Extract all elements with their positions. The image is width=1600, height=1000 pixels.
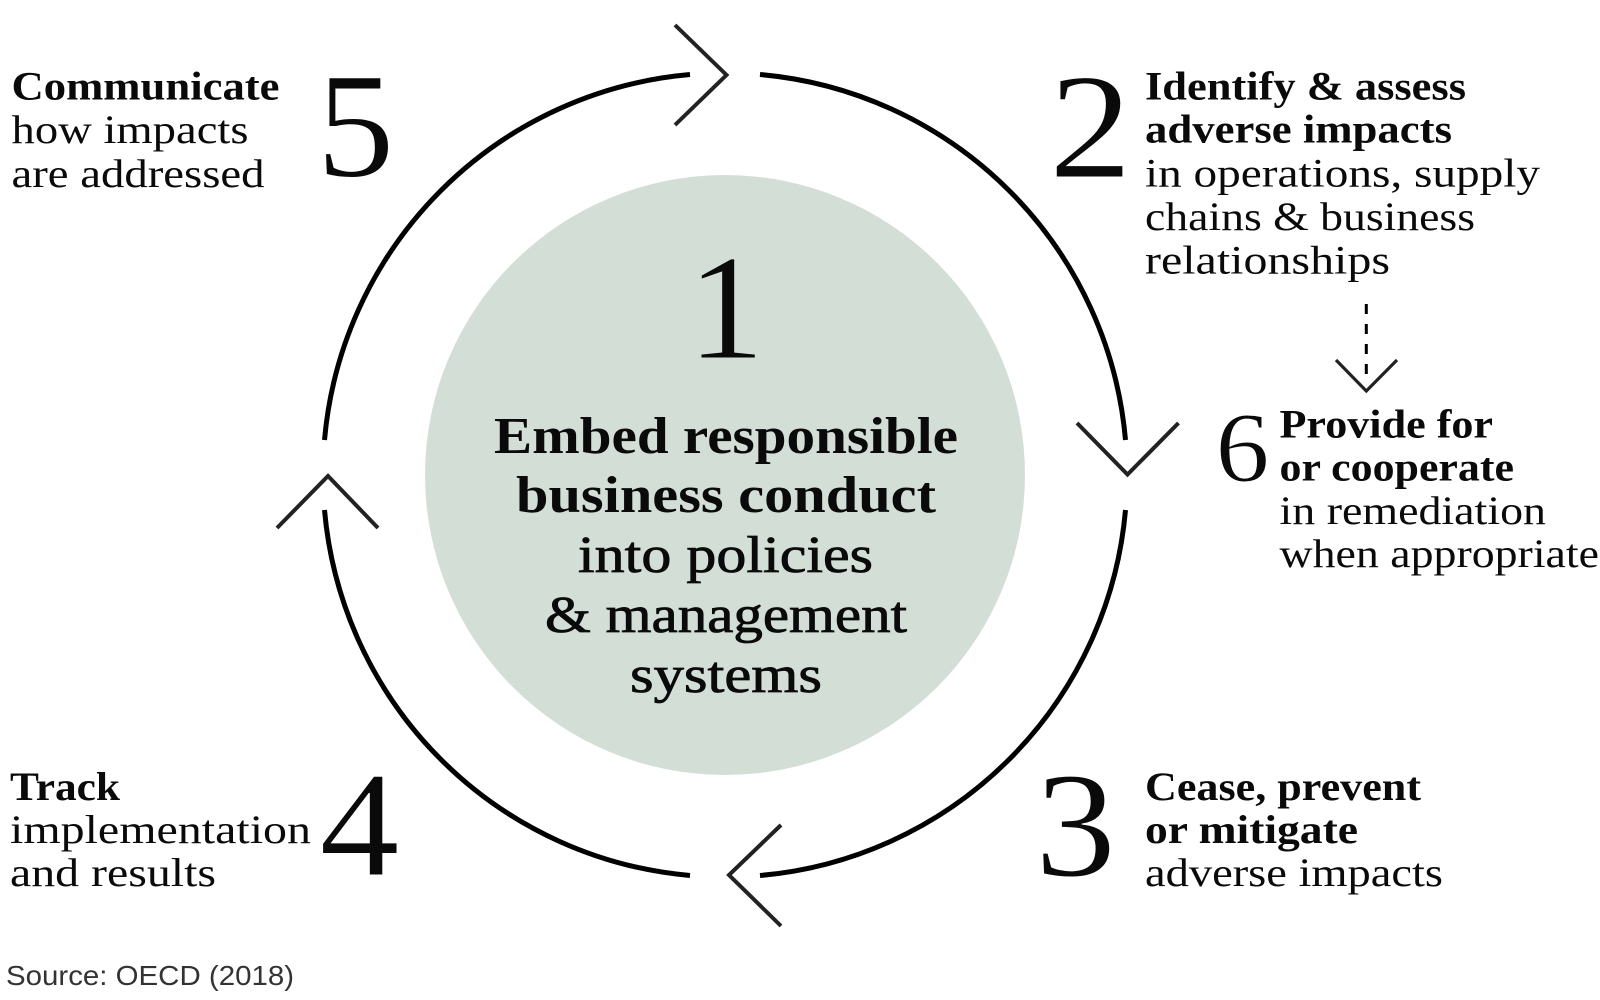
step 4: track implementation and results [10,742,400,908]
cycle ring arcs [324,74,1126,876]
step 5: communicate how impacts are addressed [12,43,394,209]
number 1: 1 [688,225,764,391]
central text: embed responsible business conduct: Embed responsible [494,408,958,465]
arrowhead: bottom [729,825,781,926]
step 2 text [1145,64,1540,282]
step 5 text: Communicate [12,64,280,108]
step 3 text: or mitigate [1145,807,1358,852]
central text: embed responsible business conduct: business conduct [516,467,937,524]
step 6 text: in remediation [1280,488,1546,533]
central circle: step 1 [425,175,1025,775]
step 6: provide for or cooperate in remediation [1216,392,1599,576]
number 5: 5 [316,43,394,209]
step 3 text: adverse impacts [1145,850,1443,895]
number 3: 3 [1035,742,1116,908]
central text: embed responsible business conduct: systems [630,647,822,704]
central text: embed responsible business conduct: into policies [578,527,873,584]
central text: embed responsible business conduct: & management [545,587,908,644]
step 6 text: when appropriate [1280,531,1599,576]
arrowhead: top [675,25,726,125]
number 4: 4 [320,742,400,908]
step 2 text: adverse impacts [1145,106,1452,152]
source note: Source: OECD (2018) [6,960,294,991]
arrowhead: left [277,476,378,528]
step 4 text: implementation [10,807,311,852]
step 2 text: relationships [1145,237,1390,282]
number 6: 6 [1216,392,1270,503]
arrowhead: right [1077,423,1178,474]
step 2: identify and assess [1049,44,1540,282]
step 5 text: how impacts [12,107,248,152]
step 2 text: Identify & assess [1145,64,1466,108]
step 6 text [1280,402,1599,576]
step 4 text: and results [10,850,216,895]
step 3 text [1145,764,1443,895]
step 4 text: Track [10,764,121,809]
step 3 text: Cease, prevent [1145,764,1422,809]
step 3: cease, prevent or mitigate [1035,742,1443,908]
step 5 text [12,64,280,196]
step 6 text: Provide for [1280,402,1493,446]
step 2 text: chains & business [1145,194,1475,239]
step 2 text: in operations, supply [1145,151,1540,196]
central text: embed responsible business conduct [494,408,958,704]
step 6 text: or cooperate [1280,444,1514,490]
step 4 text [10,764,311,895]
number 2: 2 [1049,44,1132,210]
step 5 text: are addressed [12,151,264,196]
dashed arrow from step 2 to step 6 [1336,304,1397,391]
